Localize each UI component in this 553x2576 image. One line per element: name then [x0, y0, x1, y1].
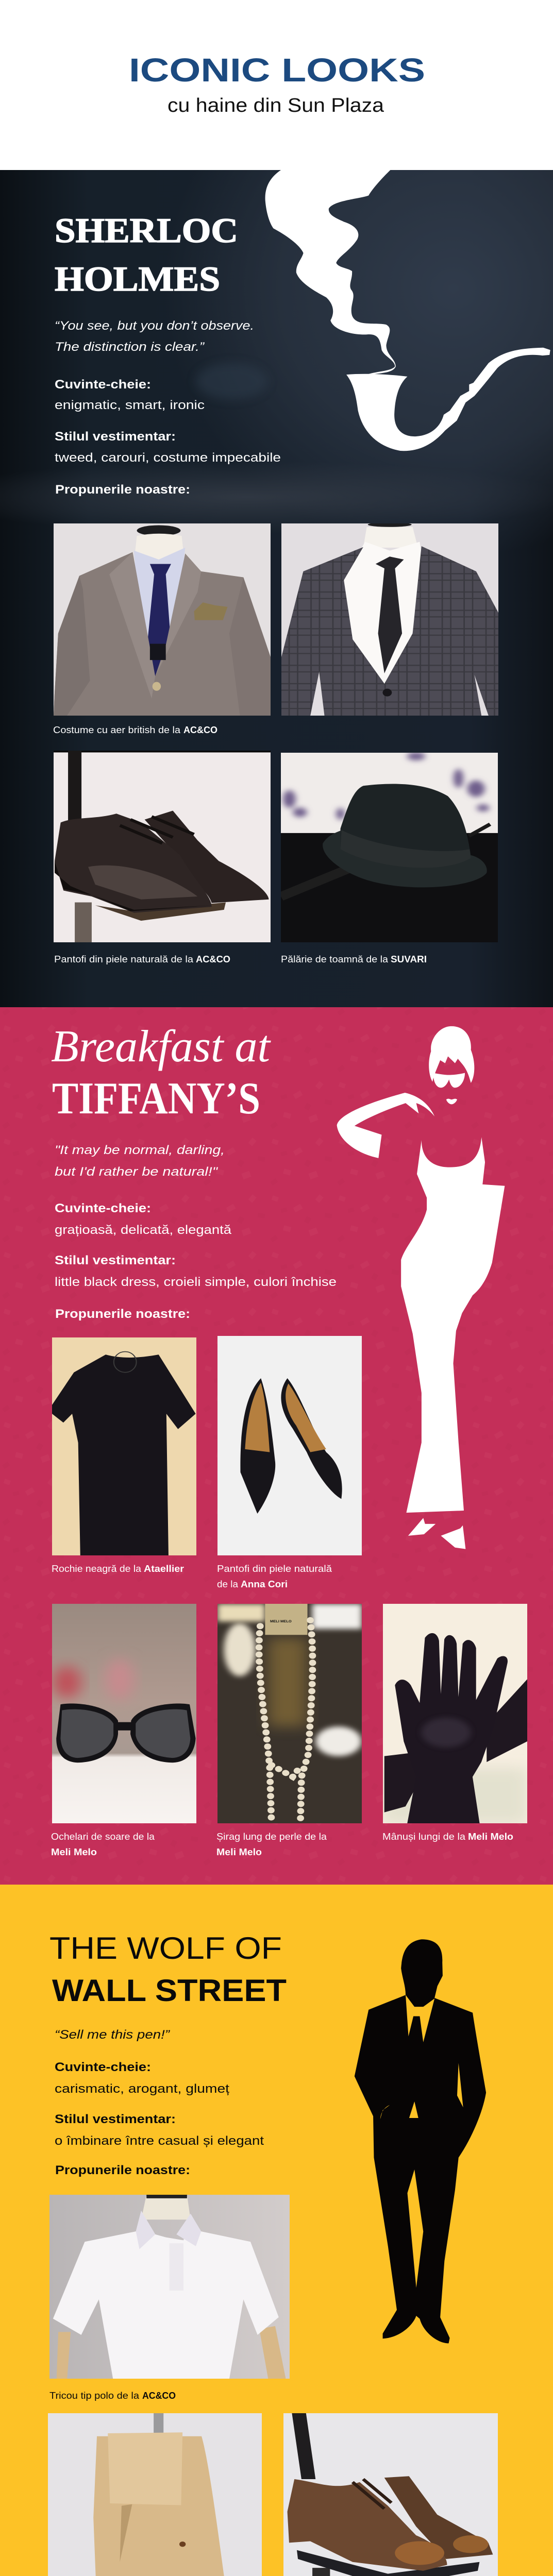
- photo: black fedora hat: [281, 753, 498, 942]
- caption: sunglasses: Meli Melo: [51, 1847, 97, 1857]
- caption: dress: [52, 1564, 184, 1574]
- caption: shoes: Pantofi din piele naturală de la: [54, 954, 194, 964]
- caption: dress: Rochie neagră de la: [52, 1564, 142, 1574]
- keywords: grațioasă, delicată, elegantă: [55, 1223, 232, 1237]
- keywords: Cuvinte-cheie:: [55, 378, 151, 392]
- photo: pearl necklace: MELI MELO: [270, 1620, 292, 1623]
- caption: hat: [281, 954, 427, 964]
- caption: suits: AC&CO: [183, 725, 217, 735]
- heading: Breakfast at Tiffany's: Breakfast at: [51, 1022, 272, 1072]
- heading: Sherlock Holmes: HOLMES: [55, 259, 220, 298]
- title: ICONIC LOOKS: [129, 52, 425, 89]
- proposals heading: Propunerile noastre:: [55, 483, 190, 497]
- clothing style: Stilul vestimentar:: [55, 1253, 176, 1267]
- icon: Audrey silhouette: [337, 1026, 505, 1549]
- keywords: enigmatic, smart, ironic: [55, 398, 205, 412]
- quote: “Sell me this pen!”: [55, 2028, 170, 2042]
- heading: The Wolf of Wall Street: THE WOLF OF: [49, 1931, 282, 1965]
- keywords: Cuvinte-cheie:: [55, 1201, 151, 1215]
- photo: white polo shirt: [49, 2195, 290, 2379]
- caption: gloves: [382, 1832, 513, 1842]
- photo: checked suit: [281, 523, 498, 716]
- quote: but I'd rather be natural!": [55, 1165, 219, 1179]
- keywords: [55, 2060, 229, 2096]
- caption: suits: Costume cu aer british de la: [53, 725, 181, 735]
- heading: The Wolf of Wall Street: [49, 1931, 287, 2008]
- caption: sunglasses: Ochelari de soare de la: [51, 1832, 155, 1842]
- header: [129, 52, 425, 116]
- quote: The distinction is clear.”: [55, 340, 205, 354]
- caption: pearls: [216, 1832, 327, 1857]
- proposals heading: Propunerile noastre:: [55, 2163, 190, 2177]
- clothing style: [55, 2112, 264, 2148]
- caption: stilettos: Pantofi din piele naturală: [217, 1564, 332, 1574]
- clothing style: Stilul vestimentar:: [55, 430, 176, 444]
- caption: hat: SUVARI: [391, 954, 427, 964]
- caption: sunglasses: [51, 1832, 155, 1857]
- quote: "It may be normal, darling,: [55, 1143, 225, 1157]
- keywords: Cuvinte-cheie:: [55, 2060, 151, 2074]
- caption: pearls: Șirag lung de perle de la: [216, 1832, 327, 1842]
- icon: businessman silhouette: [355, 1939, 486, 2343]
- keywords: [55, 1201, 232, 1237]
- caption: stilettos: de la: [217, 1579, 239, 1589]
- caption: polo: [49, 2391, 176, 2401]
- caption: pearls: Meli Melo: [216, 1847, 262, 1857]
- caption: gloves: Meli Melo: [468, 1832, 513, 1842]
- heading: Sherlock Holmes: SHERLOC: [55, 211, 238, 250]
- caption: shoes: AC&CO: [196, 954, 230, 964]
- caption: stilettos: Anna Cori: [241, 1579, 288, 1589]
- photo: tweed suit: [54, 523, 271, 716]
- photo: chino trousers: [48, 2413, 262, 2576]
- caption: hat: Pălărie de toamnă de la: [281, 954, 389, 964]
- photo: black stilettos: [217, 1336, 362, 1555]
- clothing style: tweed, carouri, costume impecabile: [55, 451, 281, 465]
- caption: stilettos: [217, 1564, 332, 1589]
- subtitle: cu haine din Sun Plaza: [167, 95, 384, 116]
- photo: pearl necklace: [217, 1604, 362, 1823]
- heading: Sherlock Holmes: [55, 211, 238, 298]
- clothing style: Stilul vestimentar:: [55, 2112, 176, 2126]
- proposals heading: Propunerile noastre:: [55, 1307, 190, 1321]
- heading: The Wolf of Wall Street: WALL STREET: [52, 1973, 287, 2008]
- caption: dress: Ataellier: [144, 1564, 184, 1574]
- caption: polo: Tricou tip polo de la: [49, 2391, 140, 2401]
- panel: Breakfast at Tiffany's: [0, 1007, 553, 1885]
- panel: The Wolf of Wall Street: [0, 1885, 553, 2576]
- panel: Sherlock Holmes: [0, 170, 553, 1007]
- clothing style: little black dress, croieli simple, culori închise: [55, 1275, 337, 1289]
- photo: black brogues: [54, 751, 271, 942]
- clothing style: [55, 1253, 337, 1289]
- clothing style: o îmbinare între casual și elegant: [55, 2134, 264, 2148]
- quote: [55, 319, 254, 354]
- photo: brown leather shoes: [283, 2413, 498, 2576]
- heading: Breakfast at Tiffany's: TIFFANY’S: [52, 1074, 260, 1124]
- photo: black dress: [52, 1337, 196, 1555]
- photo: satin gloves: [383, 1604, 527, 1823]
- caption: polo: AC&CO: [142, 2391, 176, 2401]
- keywords: carismatic, arogant, glumeț: [55, 2082, 229, 2096]
- caption: gloves: Mânuși lungi de la: [382, 1832, 466, 1842]
- quote: “You see, but you don’t observe.: [55, 319, 254, 333]
- clothing style: [55, 430, 281, 465]
- photo: sunglasses: [52, 1604, 196, 1823]
- icon: smoke silhouette of Sherlock profile: [265, 170, 550, 451]
- quote: [55, 1143, 225, 1179]
- keywords: [55, 378, 205, 412]
- heading: Breakfast at Tiffany's: [51, 1022, 272, 1124]
